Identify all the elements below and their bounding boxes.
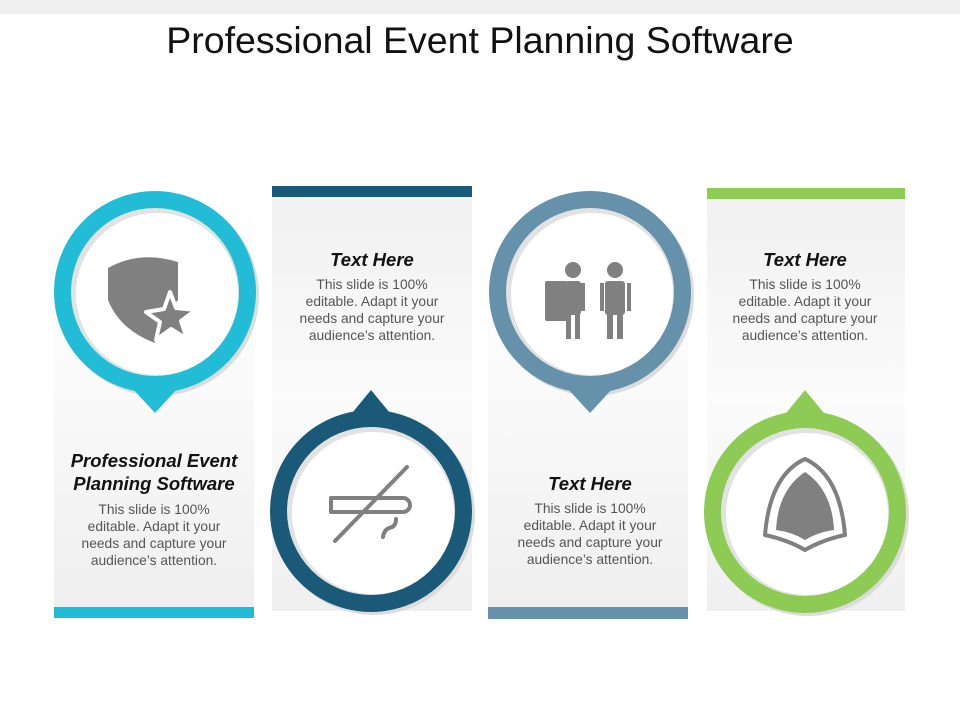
text: panel 2: editable. Adapt it your [306, 294, 438, 309]
text: panel 2 [300, 249, 444, 343]
text: panel 3: editable. Adapt it your [524, 518, 656, 533]
icon: no smoking [331, 467, 410, 541]
text: panel 4 [733, 249, 878, 343]
text: panel 4: editable. Adapt it your [739, 294, 871, 309]
title: Professional Event Planning Software [166, 19, 794, 61]
text: panel 2: Text Here [330, 249, 414, 270]
top strip [0, 0, 960, 14]
panel 2 [270, 186, 475, 615]
text: panel 1: audience’s attention. [91, 553, 217, 568]
text: panel 1: Planning Software [73, 473, 235, 494]
text: panel 3 [518, 473, 662, 567]
text: panel 1: editable. Adapt it your [88, 519, 220, 534]
text: panel 2: This slide is 100% [316, 277, 428, 292]
text: panel 3: This slide is 100% [534, 501, 646, 516]
panel 1 [54, 191, 259, 618]
text: panel 3: needs and capture your [518, 535, 662, 550]
text: panel 4: This slide is 100% [749, 277, 861, 292]
text: panel 1: Professional Event [71, 450, 237, 471]
icon: arch shield [765, 459, 845, 550]
text: panel 1: needs and capture your [82, 536, 226, 551]
text: panel 2: audience’s attention. [309, 328, 435, 343]
text: panel 1: This slide is 100% [98, 502, 210, 517]
text: panel 2: needs and capture your [300, 311, 444, 326]
text: panel 4: Text Here [763, 249, 847, 270]
icon: guards [545, 262, 631, 339]
icon: shield star [108, 257, 196, 343]
text: panel 4: needs and capture your [733, 311, 877, 326]
panel 4 [704, 188, 909, 616]
text: panel 1 [71, 450, 238, 568]
panel 3 [488, 191, 694, 619]
text: panel 3: audience’s attention. [527, 552, 653, 567]
text: panel 3: Text Here [548, 473, 632, 494]
text: panel 4: audience’s attention. [742, 328, 868, 343]
